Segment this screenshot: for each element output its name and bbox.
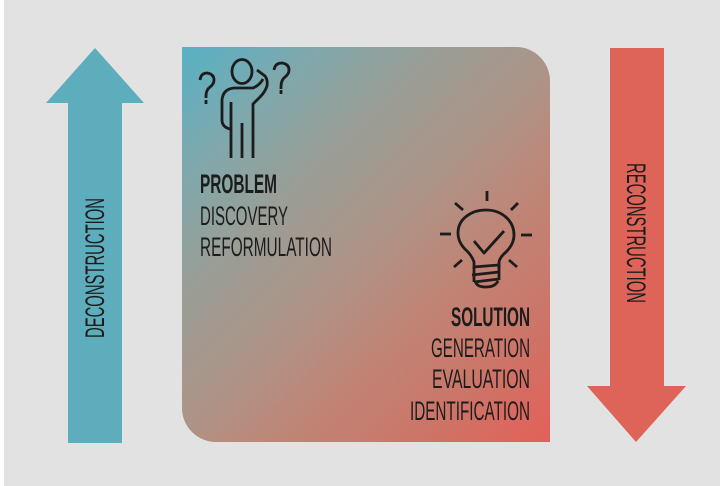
label: reconstruction: RECONSTRUCTION: [621, 163, 651, 303]
text: discovery: DISCOVERY: [200, 201, 288, 231]
arrow: reconstruction (down): [587, 48, 686, 442]
heading: problem: PROBLEM: [200, 169, 277, 199]
icon: thinking person with question marks: [200, 60, 289, 158]
arrow: deconstruction (up): [46, 48, 144, 443]
text: identification: IDENTIFICATION: [410, 396, 530, 426]
panel: gradient square: [182, 47, 550, 442]
icon: light bulb with check mark: [440, 191, 532, 287]
heading: solution: SOLUTION: [451, 302, 530, 332]
text: reformulation: REFORMULATION: [200, 232, 332, 262]
text: generation: GENERATION: [431, 333, 530, 363]
text: evaluation: EVALUATION: [432, 364, 530, 394]
label: deconstruction: DECONSTRUCTION: [80, 198, 110, 338]
